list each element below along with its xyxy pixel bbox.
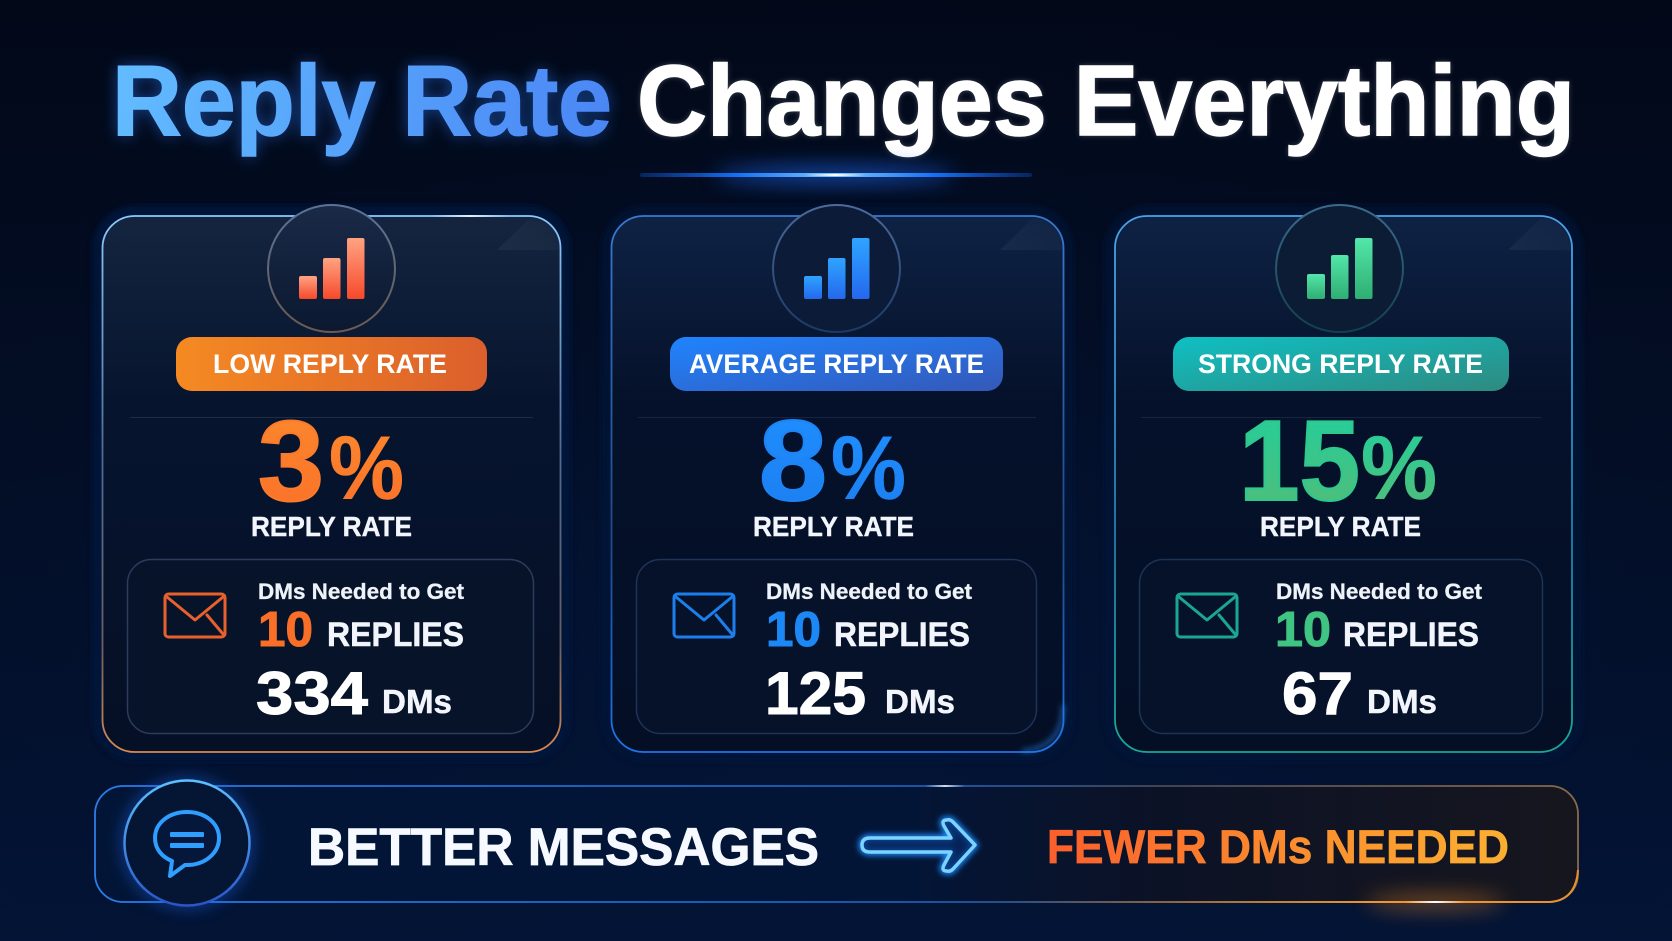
text: fewer DMs needed: FEWER DMs NEEDED [1047, 820, 1509, 873]
panel: strong reply rate [1104, 205, 1583, 762]
DMs needed box: 10 [766, 603, 821, 657]
stat: 8%: % [831, 419, 906, 519]
DMs needed box: REPLIES [834, 616, 970, 654]
DMs needed box: DMs Needed to Get [766, 579, 973, 604]
DMs needed box: DMs [382, 683, 452, 720]
label pill: average reply rate: AVERAGE REPLY RATE [689, 349, 984, 379]
title [112, 45, 1575, 157]
text: better messages: BETTER MESSAGES [308, 818, 819, 877]
label pill: low reply rate: LOW REPLY RATE [213, 349, 447, 379]
stat: 15%: % [1361, 419, 1437, 519]
stat: 8%: 8 [759, 398, 827, 525]
title underline [640, 166, 1032, 184]
stat: 15%: 15 [1239, 398, 1360, 525]
icon: message bubble [121, 777, 253, 909]
label pill: average reply rate [670, 337, 1003, 391]
DMs needed box [1140, 560, 1542, 734]
icon: orange bar chart [268, 205, 395, 332]
title: Reply Rate [112, 45, 612, 157]
icon: envelope orange [165, 594, 225, 637]
DMs needed box: 334 [256, 660, 369, 727]
stat: 15% [1239, 398, 1437, 525]
stat: 8% [759, 398, 906, 525]
label pill: strong reply rate: STRONG REPLY RATE [1198, 349, 1483, 379]
icon: green bar chart [1276, 205, 1403, 332]
DMs needed box: DMs [1367, 683, 1437, 720]
caption: reply rate: REPLY RATE [1260, 511, 1421, 542]
DMs needed box: REPLIES [1343, 616, 1479, 654]
DMs needed box: 67 [1282, 660, 1353, 727]
banner: better messages to fewer DMs [95, 777, 1578, 910]
panel: low reply rate [92, 205, 571, 762]
DMs needed box: DMs Needed to Get [258, 579, 465, 604]
DMs needed box [636, 560, 1036, 734]
DMs needed box: 125 [765, 660, 866, 727]
DMs needed box: 10 [258, 603, 313, 657]
stat: 3%: % [329, 419, 404, 519]
title: Changes Everything [637, 45, 1575, 157]
DMs needed box: 10 [1275, 603, 1331, 657]
icon: blue bar chart [773, 205, 900, 332]
label pill: low reply rate [176, 337, 487, 391]
DMs needed box: REPLIES [327, 616, 464, 654]
icon: envelope blue [674, 594, 734, 637]
arrow [862, 820, 975, 871]
DMs needed box [128, 560, 534, 734]
DMs needed box: DMs Needed to Get [1276, 579, 1483, 604]
title: Reply Rate [112, 45, 612, 157]
panel: average reply rate [601, 205, 1074, 762]
stat: 3%: 3 [258, 398, 324, 525]
caption: reply rate: REPLY RATE [753, 511, 914, 542]
icon: envelope teal [1177, 594, 1237, 637]
DMs needed box: DMs [885, 683, 955, 720]
caption: reply rate: REPLY RATE [251, 511, 412, 542]
title: Changes Everything [637, 45, 1575, 157]
stat: 3% [258, 398, 404, 525]
label pill: strong reply rate [1173, 337, 1509, 391]
